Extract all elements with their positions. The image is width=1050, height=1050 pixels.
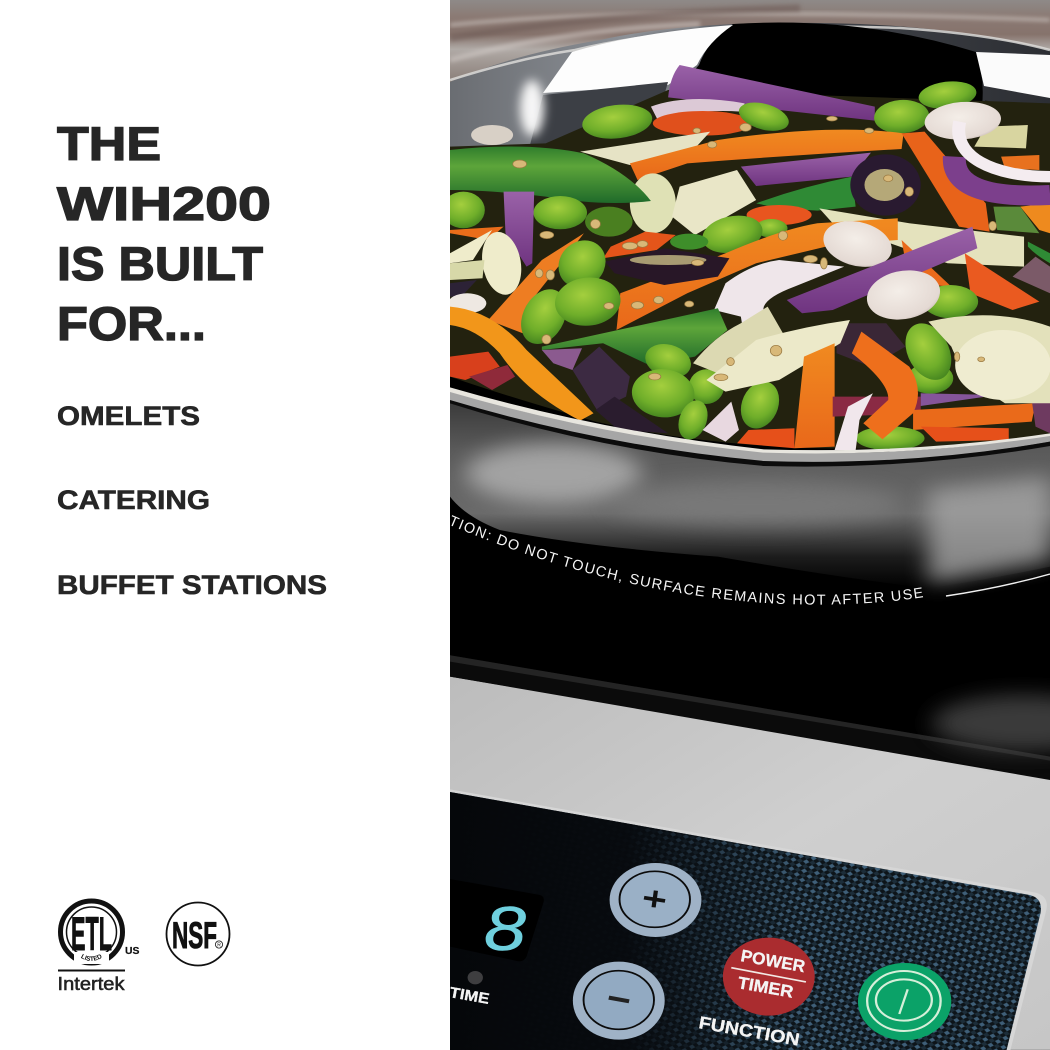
sesame seeds bbox=[513, 116, 996, 381]
heading: the WIH200 is built for: IS BUILT bbox=[57, 237, 263, 290]
cooktop caution ring text bbox=[452, 515, 1050, 605]
icon: NSF certification mark bbox=[166, 902, 230, 966]
stainless steel cooktop body bbox=[450, 655, 1050, 1050]
heading: the WIH200 is built for: THE bbox=[57, 117, 161, 170]
panel labels bbox=[450, 950, 805, 1046]
heading: the WIH200 is built for: WIH200 bbox=[57, 177, 271, 230]
icon: NSF certification mark: NSF bbox=[172, 915, 217, 956]
list of uses: CATERING bbox=[57, 485, 210, 515]
heading: the WIH200 is built for: FOR... bbox=[57, 297, 206, 350]
list of uses: OMELETS bbox=[57, 401, 200, 431]
button: minus bbox=[573, 962, 665, 1040]
pan upper interior bbox=[450, 0, 1050, 160]
panel labels: TIMER bbox=[736, 973, 795, 1002]
white reflection left bbox=[543, 25, 733, 93]
button: plus bbox=[610, 863, 701, 937]
icon: NSF certification mark: R bbox=[217, 942, 221, 948]
button: power timer bbox=[723, 938, 815, 1016]
panel labels: FUNCTION bbox=[697, 1012, 801, 1050]
heading: the WIH200 is built for bbox=[57, 117, 271, 350]
white reflection right bbox=[976, 52, 1050, 98]
panel: white text column bbox=[0, 0, 450, 1050]
black reflection in pan bbox=[696, 22, 983, 101]
photo: wok of vegetables on induction cooktop bbox=[450, 0, 1050, 1050]
list of uses: BUFFET STATIONS bbox=[57, 570, 327, 600]
icon: ETL listed Intertek certification mark: Intertek bbox=[58, 973, 125, 994]
icon: ETL listed Intertek certification mark bbox=[58, 898, 140, 994]
icon: ETL listed Intertek certification mark: US bbox=[125, 946, 140, 957]
button: on off bbox=[858, 963, 951, 1040]
panel labels: POWER bbox=[739, 946, 807, 976]
indicator light bbox=[468, 971, 483, 984]
digit on timer display: 8 bbox=[484, 895, 527, 964]
icon: ETL listed Intertek certification mark: ETL bbox=[71, 907, 112, 960]
icon: ETL listed Intertek certification mark: LISTED bbox=[80, 954, 102, 961]
panel labels: TIME bbox=[448, 984, 491, 1008]
wok rim and body bbox=[450, 387, 1050, 588]
vegetables bbox=[442, 65, 1050, 450]
cooktop caution ring text: CAUTION: DO NOT TOUCH, SURFACE REMAINS HOT AFTER USE bbox=[452, 515, 924, 605]
control panel with carbon texture bbox=[450, 789, 1047, 1050]
timer display with digit bbox=[450, 879, 544, 961]
list of uses bbox=[57, 401, 327, 600]
